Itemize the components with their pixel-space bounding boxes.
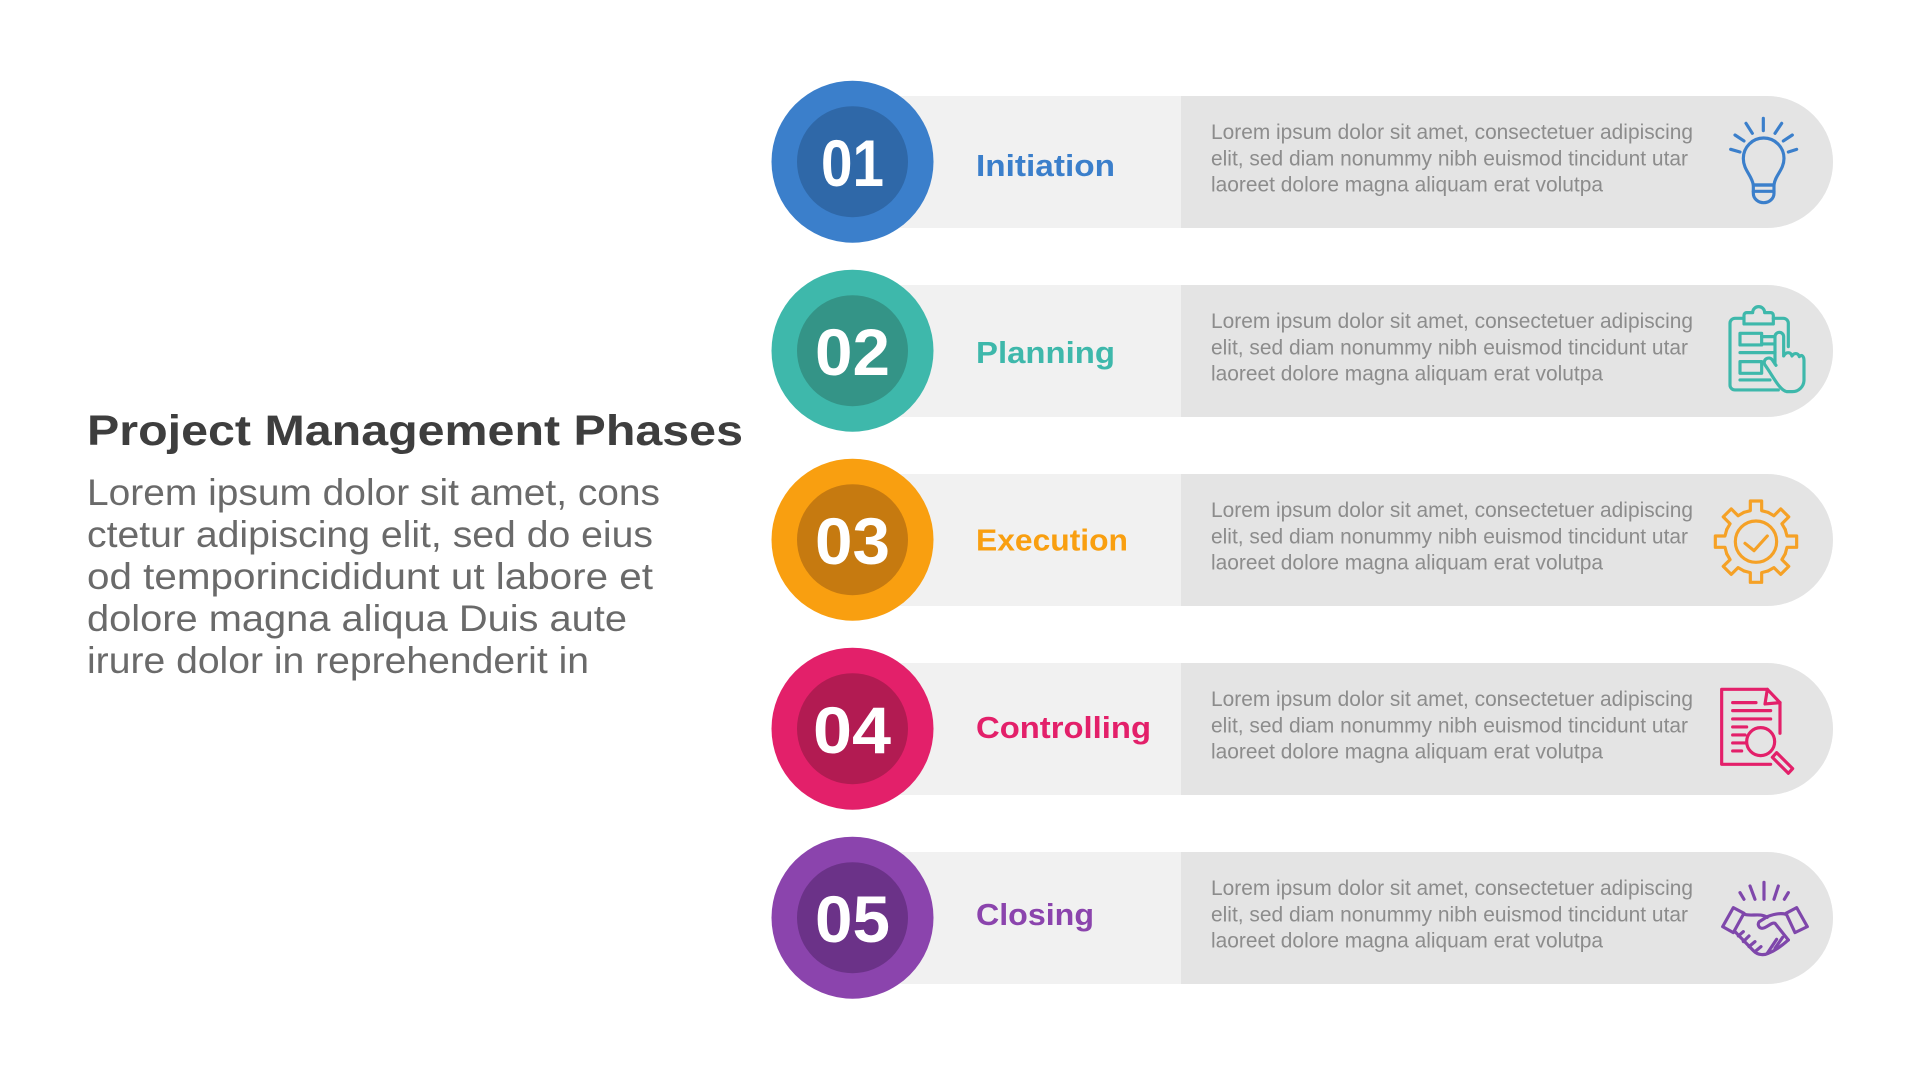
number circle — [772, 648, 934, 810]
description: Lorem ipsum dolor sit amet, consectetuer adipiscing — [1211, 309, 1693, 333]
phase label: Execution — [976, 522, 1128, 558]
description: elit, sed diam nonummy nibh euismod tincidunt utar — [1211, 902, 1688, 926]
icon: light bulb — [1731, 118, 1797, 203]
intro text block: od temporincididunt ut labore et — [87, 556, 654, 597]
description: Lorem ipsum dolor sit amet, consectetuer adipiscing — [1211, 120, 1693, 144]
description: laoreet dolore magna aliquam erat volutpa — [1211, 550, 1603, 574]
icon: handshake — [1723, 882, 1807, 955]
title: Project Management Phases — [87, 407, 743, 455]
phase label: Initiation — [976, 148, 1115, 183]
panel: phase 04 Controlling — [772, 648, 1833, 810]
description: laoreet dolore magna aliquam erat volutpa — [1211, 740, 1603, 764]
description: Lorem ipsum dolor sit amet, consectetuer adipiscing — [1211, 687, 1693, 711]
number: 05 — [815, 882, 890, 956]
description: elit, sed diam nonummy nibh euismod tincidunt utar — [1211, 146, 1688, 170]
phase label: Controlling — [976, 710, 1151, 745]
panel: phase 05 Closing — [772, 837, 1833, 999]
number circle — [772, 81, 934, 243]
bar background — [852, 285, 1833, 417]
description: laoreet dolore magna aliquam erat volutpa — [1211, 172, 1603, 196]
inner circle — [797, 295, 908, 406]
description — [1211, 309, 1693, 386]
inner circle — [797, 862, 908, 973]
number: 03 — [815, 504, 890, 578]
intro text block — [87, 472, 660, 681]
bar background — [852, 663, 1833, 795]
intro text block: dolore magna aliqua Duis aute — [87, 598, 627, 639]
description — [1211, 498, 1693, 574]
number circle — [772, 459, 934, 621]
bar description area — [1181, 285, 1833, 417]
description: elit, sed diam nonummy nibh euismod tincidunt utar — [1211, 336, 1688, 360]
number: 02 — [815, 315, 890, 389]
bar description area — [1181, 852, 1833, 984]
intro text block: irure dolor in reprehenderit in — [87, 640, 589, 681]
icon: gear with check — [1715, 501, 1797, 582]
panel: phase 03 Execution — [772, 459, 1833, 621]
description — [1211, 876, 1693, 952]
bar description area — [1181, 96, 1833, 228]
intro text block: Lorem ipsum dolor sit amet, cons — [87, 472, 660, 513]
panel: phase 02 Planning — [772, 270, 1833, 432]
phase label: Closing — [976, 897, 1094, 932]
description — [1211, 120, 1693, 196]
icon: document with magnifier — [1722, 689, 1793, 773]
inner circle — [797, 484, 908, 595]
panel: phase 01 Initiation — [772, 81, 1833, 243]
description: laoreet dolore magna aliquam erat volutpa — [1211, 928, 1603, 952]
number: 04 — [813, 693, 891, 767]
bar description area — [1181, 663, 1833, 795]
bar description area — [1181, 474, 1833, 606]
phase label: Planning — [976, 335, 1115, 370]
description — [1211, 687, 1693, 764]
intro text block: ctetur adipiscing elit, sed do eius — [87, 514, 653, 555]
description: Lorem ipsum dolor sit amet, consectetuer adipiscing — [1211, 876, 1693, 900]
description: elit, sed diam nonummy nibh euismod tincidunt utar — [1211, 714, 1688, 738]
number: 01 — [821, 126, 884, 200]
description: elit, sed diam nonummy nibh euismod tincidunt utar — [1211, 524, 1688, 548]
number circle — [772, 270, 934, 432]
bar background — [852, 474, 1833, 606]
inner circle — [797, 673, 908, 784]
bar background — [852, 852, 1833, 984]
inner circle — [797, 106, 908, 217]
description: Lorem ipsum dolor sit amet, consectetuer adipiscing — [1211, 498, 1693, 522]
icon: clipboard with hand — [1730, 307, 1804, 392]
description: laoreet dolore magna aliquam erat volutpa — [1211, 362, 1603, 386]
number circle — [772, 837, 934, 999]
bar background — [852, 96, 1833, 228]
